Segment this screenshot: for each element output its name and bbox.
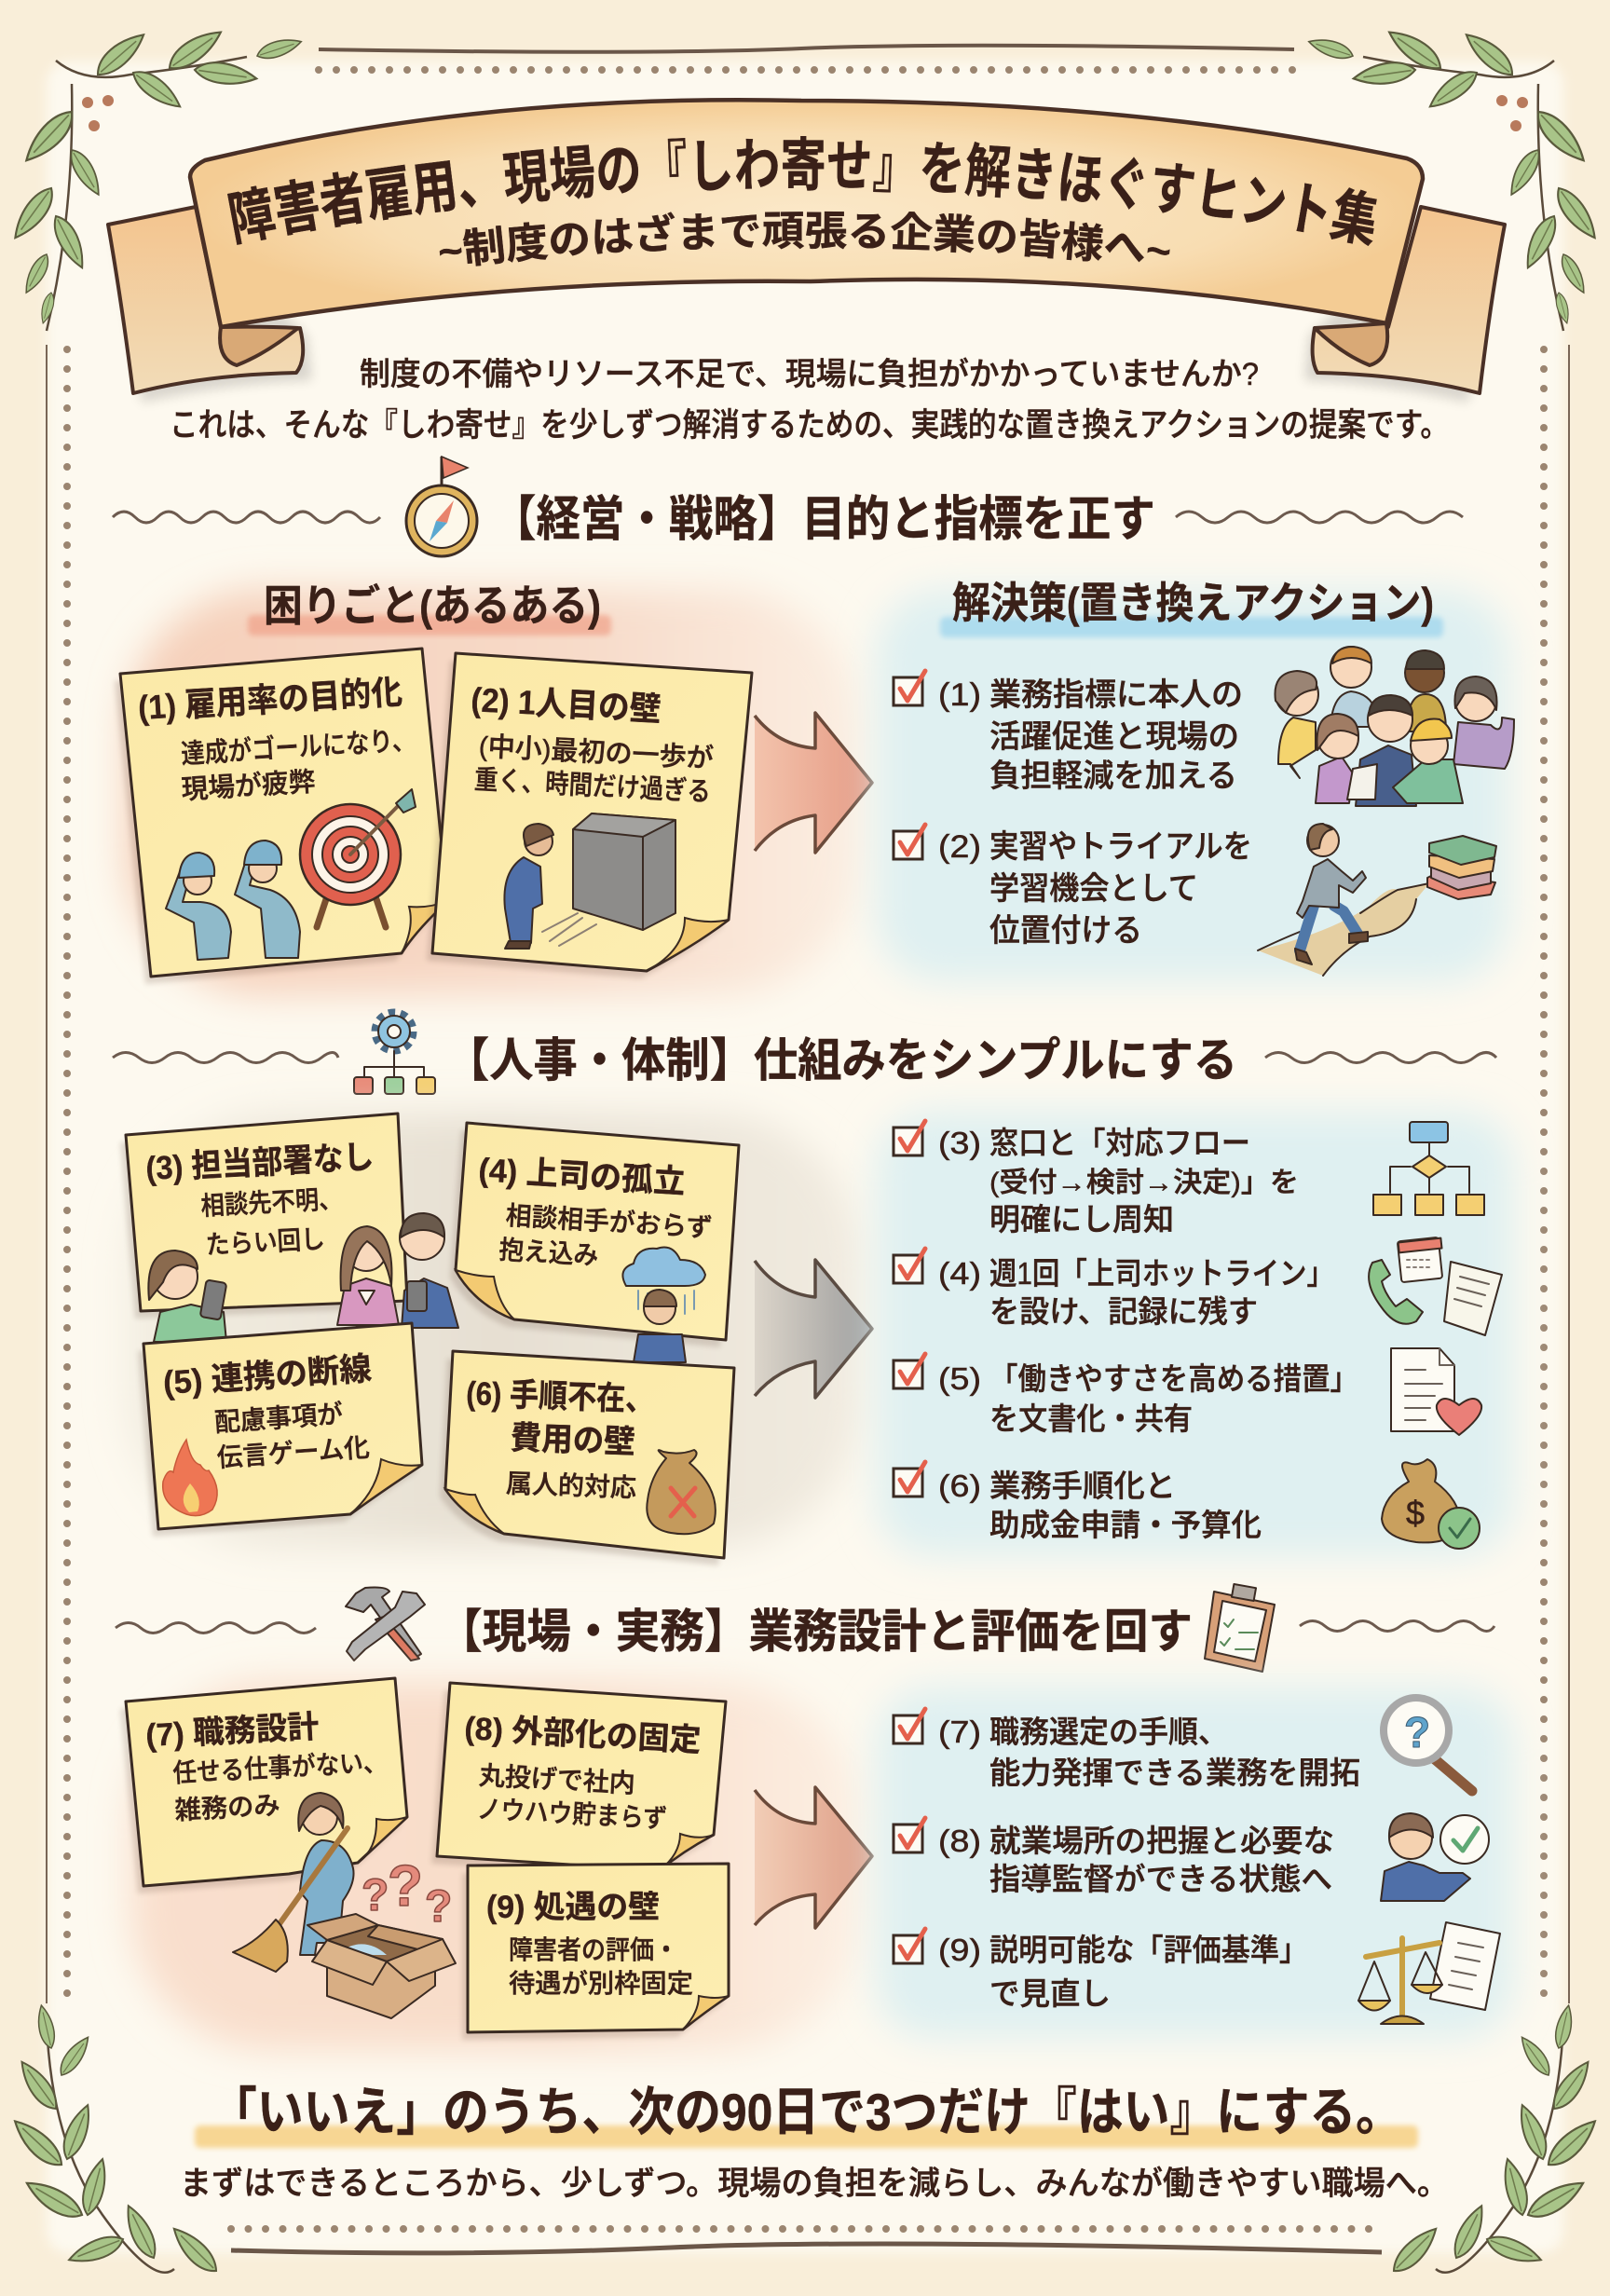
text: 助成金申請・予算化 bbox=[989, 1508, 1262, 1542]
text bbox=[938, 1126, 1299, 1237]
text: 就業場所の把握と必要な bbox=[989, 1824, 1334, 1858]
text bbox=[938, 1824, 1334, 1896]
sticky note 8 bbox=[431, 1683, 726, 1878]
text: 窓口と「対応フロー bbox=[989, 1126, 1250, 1160]
section 1 heading bbox=[113, 457, 1463, 556]
sticky note 9 bbox=[462, 1864, 729, 2040]
text bbox=[938, 1933, 1308, 2011]
text: 位置付ける bbox=[989, 913, 1142, 949]
panel heading: solutions: 解決策(置き換えアクション) bbox=[952, 579, 1434, 627]
note text: (7) 職務設計 bbox=[144, 1709, 320, 1754]
icon: question marks: ? bbox=[425, 1882, 452, 1932]
text bbox=[938, 1361, 1358, 1436]
icon: checkbox bbox=[894, 1929, 925, 1963]
callout subtext: まずはできるところから、少しずつ。現場の負担を減らし、みんなが働きやすい職場へ。 bbox=[180, 2166, 1449, 2202]
icon: checkbox bbox=[894, 1121, 925, 1155]
icon: scales and document bbox=[1358, 1922, 1500, 2024]
callout: closing message bbox=[180, 2083, 1449, 2202]
text: 職務選定の手順、 bbox=[989, 1715, 1228, 1749]
note text: 相談先不明、 bbox=[200, 1184, 343, 1221]
text bbox=[938, 829, 1252, 949]
icon: checkbox bbox=[894, 825, 925, 859]
note text: 障害者の評価・ bbox=[509, 1935, 678, 1964]
sticky note 7 bbox=[120, 1678, 407, 1893]
text bbox=[938, 1256, 1334, 1329]
title text: 障害者雇用、現場の『しわ寄せ』を解きほぐすヒント集 bbox=[227, 136, 1377, 246]
text: 「働きやすさを高める措置」 bbox=[989, 1361, 1358, 1396]
note text: (3) 担当部署なし bbox=[144, 1139, 375, 1187]
note text bbox=[466, 680, 716, 808]
subtitle: ~制度のはざまで頑張る企業の皆様へ~ bbox=[440, 211, 1170, 266]
heading text: 【経営・戦略】目的と指標を正す bbox=[492, 493, 1155, 547]
note text: (2) 1人目の壁 bbox=[471, 680, 662, 729]
frame: bottom border lines bbox=[231, 2229, 1382, 2253]
sticky note 3 bbox=[120, 1114, 407, 1319]
text: 実習やトライアルを bbox=[989, 829, 1252, 865]
icon: checkbox bbox=[894, 671, 925, 705]
text: を文書化・共有 bbox=[989, 1401, 1193, 1436]
note text bbox=[144, 1706, 389, 1826]
text: (受付→検討→決定)」を bbox=[989, 1168, 1299, 1198]
text: 指導監督ができる状態へ bbox=[989, 1862, 1332, 1896]
callout headline: 「いいえ」のうち、次の90日で3つだけ『はい』にする。 bbox=[211, 2083, 1402, 2141]
panel: solutions 2 background bbox=[876, 1111, 1514, 1556]
note text: 費用の壁 bbox=[510, 1420, 635, 1460]
icon: document with heart bbox=[1391, 1348, 1481, 1435]
sticky note 5 bbox=[138, 1323, 422, 1537]
solution (2) bbox=[894, 825, 1252, 949]
note text: (中小)最初の一歩が bbox=[478, 731, 715, 774]
text: (4) bbox=[938, 1256, 981, 1291]
icon: tired workers bbox=[166, 840, 300, 960]
solution (6) bbox=[894, 1462, 1262, 1542]
note text: 相談相手がおらず bbox=[505, 1201, 713, 1242]
panel heading: problems: 困りごと(あるある) bbox=[264, 581, 601, 630]
panel: problems 3 background bbox=[130, 1682, 862, 2050]
text: (1) bbox=[938, 677, 981, 713]
solution (9) bbox=[894, 1929, 1308, 2011]
icon: checkbox bbox=[894, 1354, 925, 1388]
icon: team of people bbox=[1275, 647, 1514, 806]
note text: 属人的対応 bbox=[506, 1469, 637, 1502]
text bbox=[938, 677, 1243, 794]
note text bbox=[137, 672, 418, 808]
text: (3) bbox=[938, 1126, 981, 1160]
note text: たらい回し bbox=[205, 1224, 326, 1260]
icon: checkbox bbox=[894, 1249, 925, 1283]
icon: money bag with cross bbox=[647, 1450, 716, 1534]
solution (3) bbox=[894, 1121, 1299, 1237]
icon: rain cloud over worker bbox=[622, 1247, 705, 1362]
note text: (4) 上司の孤立 bbox=[478, 1152, 686, 1201]
note text bbox=[463, 1375, 655, 1503]
sticky note 1 bbox=[115, 649, 447, 984]
icon: checkbox bbox=[894, 1818, 925, 1852]
note text: 抱え込み bbox=[498, 1236, 599, 1270]
note text: 達成がゴールになり、 bbox=[180, 725, 416, 770]
text: (6) bbox=[938, 1469, 981, 1503]
panel: solutions 3 background bbox=[876, 1687, 1514, 2039]
arrow: problems to solutions 3 bbox=[755, 1787, 872, 1928]
icon: checkbox bbox=[894, 1709, 925, 1743]
note text: (6) 手順不在、 bbox=[466, 1375, 655, 1418]
note text: 現場が疲弊 bbox=[181, 767, 316, 805]
note text: 重く、時間だけ過ぎる bbox=[473, 764, 712, 808]
icon: phone calendar notebook bbox=[1369, 1237, 1502, 1335]
sticky note 6 bbox=[440, 1351, 734, 1565]
text: (5) bbox=[938, 1361, 981, 1396]
text: 明確にし周知 bbox=[989, 1202, 1174, 1237]
solution (1) bbox=[894, 671, 1243, 794]
sticky note 4 bbox=[450, 1123, 739, 1362]
text: 活躍促進と現場の bbox=[989, 719, 1239, 755]
icon: magnifying glass: ? bbox=[1404, 1708, 1430, 1756]
icon: question marks bbox=[362, 1854, 452, 1932]
text: 学習機会として bbox=[989, 871, 1198, 907]
panel: solutions 1 background bbox=[876, 589, 1509, 982]
icon: question marks: ? bbox=[388, 1854, 423, 1919]
icon: flame bbox=[163, 1440, 217, 1516]
text: 週1回「上司ホットライン」 bbox=[989, 1256, 1334, 1291]
section 2 heading bbox=[113, 1013, 1496, 1094]
text: で見直し bbox=[989, 1976, 1111, 2011]
note text: (1) 雇用率の目的化 bbox=[137, 673, 403, 727]
icon: open cardboard box bbox=[307, 1914, 456, 2018]
title ribbon bbox=[106, 98, 1507, 404]
sticky note 2 bbox=[427, 653, 752, 978]
text: (7) bbox=[938, 1715, 981, 1749]
note text bbox=[144, 1139, 378, 1263]
icon: stone wall and bowing person bbox=[504, 813, 675, 949]
solution (8) bbox=[894, 1818, 1334, 1896]
heading text: 【現場・実務】業務設計と評価を回す bbox=[438, 1606, 1193, 1658]
text: (9) bbox=[938, 1933, 981, 1967]
icon: magnifying glass bbox=[1384, 1698, 1472, 1791]
note text: 丸投げで社内 bbox=[478, 1761, 636, 1798]
text: (8) bbox=[938, 1824, 981, 1858]
text: 負担軽減を加える bbox=[989, 758, 1237, 794]
icon: question marks: ? bbox=[362, 1871, 389, 1920]
text: 業務指標に本人の bbox=[989, 677, 1243, 713]
solution (5) bbox=[894, 1354, 1358, 1436]
note text: 配慮事項が bbox=[213, 1400, 344, 1437]
text: 能力発揮できる業務を開拓 bbox=[989, 1756, 1360, 1790]
note text bbox=[162, 1350, 378, 1476]
decoration: bottom-left leaves bbox=[7, 2003, 223, 2278]
text bbox=[938, 1715, 1360, 1790]
icon: gear and org chart bbox=[354, 1013, 435, 1094]
note text bbox=[459, 1711, 702, 1835]
note text: (8) 外部化の固定 bbox=[464, 1711, 702, 1758]
icon: hammer and wrench bbox=[346, 1588, 425, 1660]
icon: checkbox bbox=[894, 1462, 925, 1496]
decoration: top-right leaves bbox=[1307, 23, 1603, 331]
icon: compass with flag bbox=[406, 457, 477, 556]
arrow: problems to solutions 1 bbox=[755, 713, 872, 853]
intro text: 制度の不備やリソース不足で、現場に負担がかかっていませんか? bbox=[360, 357, 1259, 392]
text bbox=[938, 1469, 1262, 1542]
icon: confused colleagues bbox=[148, 1213, 458, 1342]
note text: 雑務のみ bbox=[174, 1791, 280, 1824]
text: (2) bbox=[938, 829, 981, 865]
icon: money bag with check bbox=[1382, 1459, 1480, 1549]
note text: 待遇が別枠固定 bbox=[509, 1969, 693, 1998]
note text: 任せる仕事がない、 bbox=[172, 1748, 388, 1788]
icon: person walking a path to books bbox=[1258, 824, 1496, 976]
arrow: problems to solutions 2 bbox=[755, 1260, 872, 1398]
note text: ノウハウ貯まらず bbox=[476, 1795, 668, 1833]
frame: top border lines bbox=[319, 46, 1294, 70]
panel: problems 1 background bbox=[126, 589, 862, 994]
section 3 heading bbox=[116, 1584, 1494, 1672]
note text: 伝言ゲーム化 bbox=[216, 1433, 371, 1472]
solution (4) bbox=[894, 1249, 1334, 1329]
decoration: top-left leaves bbox=[7, 23, 303, 331]
text: 説明可能な「評価基準」 bbox=[989, 1933, 1308, 1967]
icon: woman sweeping with box bbox=[233, 1793, 456, 2018]
note text: (9) 処遇の壁 bbox=[486, 1890, 660, 1925]
text: 業務手順化と bbox=[989, 1469, 1176, 1503]
decoration: bottom-right leaves bbox=[1387, 2003, 1603, 2278]
icon: flow chart bbox=[1373, 1122, 1484, 1215]
text: を設け、記録に残す bbox=[989, 1294, 1258, 1329]
note text bbox=[473, 1152, 716, 1277]
frame: side dotted lines bbox=[47, 345, 1569, 2010]
intro text: これは、そんな『しわ寄せ』を少しずつ解消するための、実践的な置き換えアクションの提案です。 bbox=[170, 407, 1449, 444]
icon: clipboard bbox=[1205, 1584, 1275, 1672]
icon: supervisor with check bubble bbox=[1381, 1813, 1489, 1901]
intro text bbox=[170, 357, 1449, 444]
note text bbox=[486, 1890, 693, 1998]
panel: problems 2 background bbox=[126, 1114, 862, 1547]
icon: target with arrow bbox=[300, 789, 416, 927]
solution (7) bbox=[894, 1709, 1360, 1790]
note text: (5) 連携の断線 bbox=[162, 1350, 373, 1401]
heading text: 【人事・体制】仕組みをシンプルにする bbox=[445, 1034, 1237, 1086]
icon: money bag with check: $ bbox=[1406, 1494, 1425, 1532]
